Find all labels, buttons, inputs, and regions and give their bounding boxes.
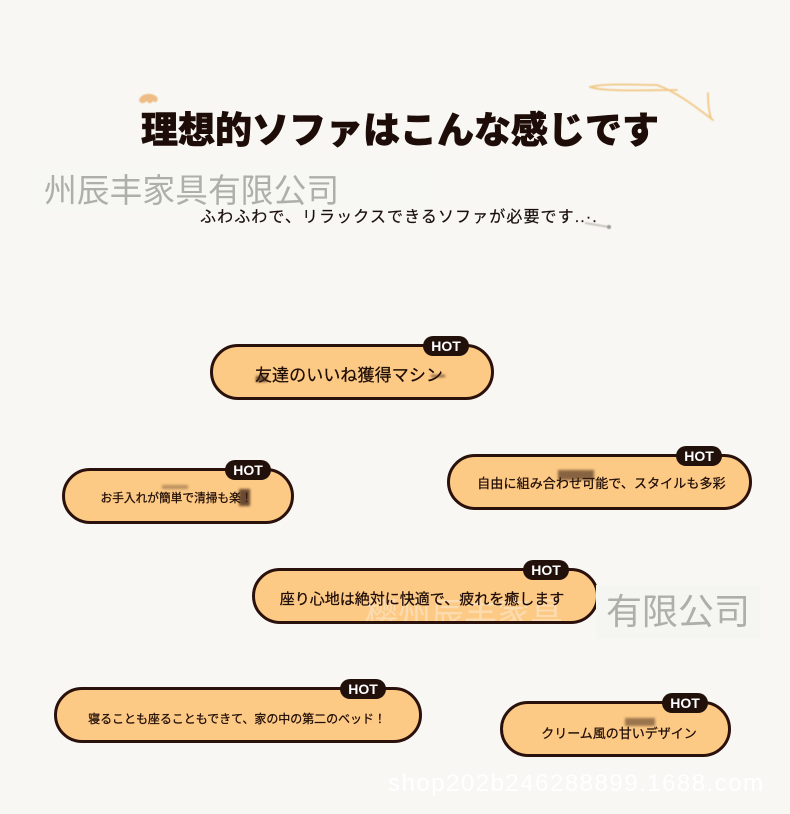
badge: hot	[423, 336, 469, 356]
watermark: company name top: 州辰丰家具有限公司	[44, 172, 339, 209]
title: 理想的ソファはこんな感じです	[141, 110, 659, 151]
badge: hot	[340, 679, 386, 699]
icon: small grey scribble by subtitle	[584, 222, 612, 230]
pill: free combination	[447, 454, 752, 510]
pill: cream style: クリーム風の甘いデザイン	[541, 726, 697, 741]
badge: hot: HOT	[233, 462, 263, 478]
badge: hot: HOT	[531, 562, 561, 578]
badge: hot	[662, 693, 708, 713]
pill: second bed	[54, 687, 422, 743]
badge: hot: HOT	[670, 695, 700, 711]
pill: free combination: 自由に組み合わせ可能で、スタイルも多彩	[477, 476, 726, 491]
watermark: company name top	[36, 167, 434, 213]
badge: hot	[523, 560, 569, 580]
badge: hot: HOT	[348, 681, 378, 697]
icon: sketched doodle top left	[138, 93, 158, 104]
pill: cream style	[500, 701, 731, 757]
pill: easy to clean	[62, 468, 294, 524]
pill: friends likes: 友達のいいね獲得マシン	[255, 366, 443, 385]
pill: comfortable seating	[252, 568, 599, 624]
badge: hot	[225, 460, 271, 480]
pill: comfortable seating: 座り心地は絶対に快適で、疲れを癒します	[280, 591, 564, 608]
badge: hot: HOT	[431, 338, 461, 354]
badge: hot	[676, 446, 722, 466]
watermark: company name lower right: 有限公司	[606, 591, 750, 632]
watermark: company name lower right	[596, 585, 760, 639]
pill: easy to clean: お手入れが簡単で清掃も楽！	[101, 492, 252, 505]
icon: sketched line top right	[588, 83, 714, 122]
pill: friends likes	[210, 344, 494, 400]
watermark: shop url: shop202b246288899.1688.com	[388, 770, 765, 797]
pill: second bed: 寝ることも座ることもできて、家の中の第二のベッド！	[88, 712, 386, 726]
subtitle: ふわふわで、リラックスできるソファが必要です..·.	[200, 209, 598, 226]
badge: hot: HOT	[684, 448, 714, 464]
